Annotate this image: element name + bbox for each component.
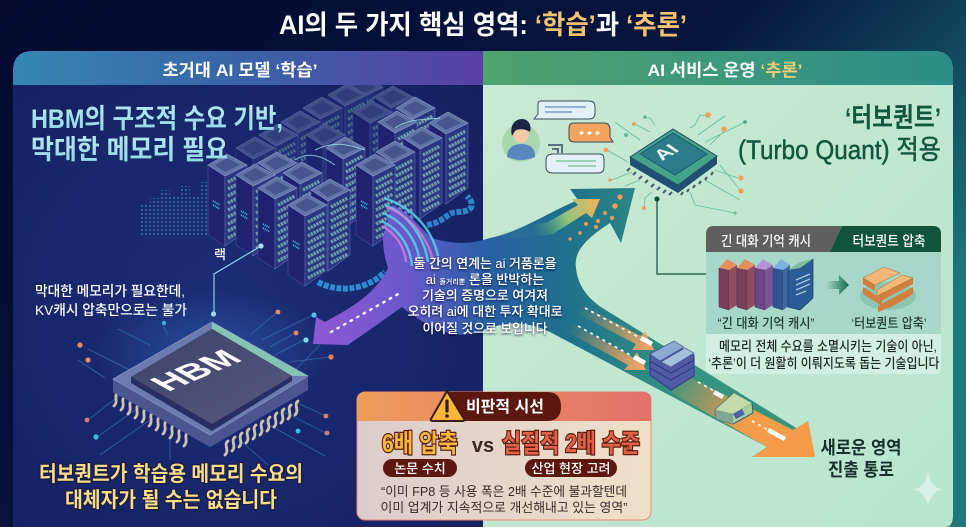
label: new market path xyxy=(820,438,902,480)
heading: HBM demand xyxy=(31,104,283,165)
arrow: compression xyxy=(826,275,849,295)
fiber strands xyxy=(381,198,438,266)
illustration: user and chat bubbles xyxy=(502,101,613,173)
central text: 기술의 증명으로 여겨져 xyxy=(422,288,548,303)
captions xyxy=(718,316,926,331)
captions: ‘터보퀀트 압축’ xyxy=(852,316,926,331)
pins xyxy=(627,168,713,195)
text: memory note xyxy=(35,283,187,318)
chip: AI: AI xyxy=(649,141,684,164)
white dashes xyxy=(578,308,772,432)
title: AI의 두 가지 핵심 영역: ‘학습’과 ‘추론’ xyxy=(279,10,687,40)
pill: paper figure: 논문 수치 xyxy=(394,461,446,476)
tab: long chat cache xyxy=(706,226,842,252)
stat: 6x compression: 6배 압축 xyxy=(382,430,458,458)
quote: 이미 업계가 지속적으로 개선해내고 있는 영역” xyxy=(380,500,628,515)
quote xyxy=(380,484,628,515)
pill: paper figure xyxy=(383,459,457,477)
central text: 오히려 ai에 대한 투자 확대로 xyxy=(408,304,563,319)
heading: turbo quant: ‘터보퀀트’ xyxy=(845,103,941,133)
data flow arrows xyxy=(313,188,815,457)
label: new market path: 새로운 영역 xyxy=(820,438,902,458)
label: rack callout: 랙 xyxy=(214,247,226,262)
purple arrow dots xyxy=(331,293,400,332)
text: memory note: KV캐시 압축만으로는 불가 xyxy=(35,302,187,318)
bubble: bottom xyxy=(546,154,604,173)
tab: turbo quant compression: 터보퀀트 압축 xyxy=(852,233,926,249)
bubble: top xyxy=(534,101,595,119)
orange dots on up arrow xyxy=(568,194,623,241)
conclusion: turbo quant cannot replace: 터보퀀트가 학습용 메모리 수요의 xyxy=(39,463,303,486)
heading: turbo quant: (Turbo Quant) 적용 xyxy=(738,135,941,165)
conclusion: turbo quant cannot replace xyxy=(39,463,303,512)
sparkle mark xyxy=(911,472,945,505)
circuit traces xyxy=(78,312,330,465)
panel: critical view xyxy=(357,391,651,520)
critical header xyxy=(357,392,651,421)
chip: HBM xyxy=(77,290,334,465)
heading: HBM demand: 막대한 메모리 필요 xyxy=(31,135,228,165)
central text: 둘 간의 연계는 ai 거품론을 xyxy=(414,256,557,271)
panel: cache compression xyxy=(706,226,941,374)
tab: long chat cache: 긴 대화 기억 캐시 xyxy=(721,233,811,249)
pins xyxy=(114,392,298,455)
chip body xyxy=(630,156,717,193)
inner light up arrow xyxy=(500,199,600,240)
server stack on arrow xyxy=(650,341,694,390)
left panel header: 초거대 AI 모델 ‘학습’ xyxy=(162,61,318,80)
circuit nodes xyxy=(77,310,334,440)
chip: AI xyxy=(604,112,747,215)
blue cable swirls under racks xyxy=(318,272,385,289)
label: new market path: 진출 통로 xyxy=(828,460,894,480)
description xyxy=(708,339,940,371)
small module on arrow xyxy=(715,393,753,424)
icon: compressed blocks xyxy=(860,267,916,312)
captions: “긴 대화 기억 캐시” xyxy=(718,316,814,331)
left panel header xyxy=(13,51,483,85)
circuit traces xyxy=(607,115,745,213)
vs: vs xyxy=(472,435,494,457)
central text: 이어질 것으로 보입니다 xyxy=(422,321,548,336)
panel: inference (right) xyxy=(483,51,953,527)
connector: AI chip to cache panel xyxy=(654,196,706,274)
central text xyxy=(408,256,563,336)
description: ‘추론’이 더 원활히 이뤄지도록 돕는 기술입니다 xyxy=(708,356,940,371)
pill: critical view: 비판적 시선 xyxy=(466,398,544,416)
panel: training (left) xyxy=(13,51,483,527)
text: memory note: 막대한 메모리가 필요한데, xyxy=(35,283,185,299)
tab: turbo quant compression xyxy=(830,226,941,252)
pill: critical view xyxy=(447,392,561,421)
circuit nodes xyxy=(604,112,747,215)
server racks xyxy=(208,76,468,286)
pill: industry: 산업 현장 고려 xyxy=(532,461,610,476)
equalizer dot graphic xyxy=(140,182,210,237)
conclusion: turbo quant cannot replace: 대체자가 될 수는 없습니다 xyxy=(65,489,277,512)
right panel header: AI 서비스 운영 ‘추론’ xyxy=(648,61,802,80)
icon: warning xyxy=(431,391,464,421)
quote: “이미 FP8 등 사용 폭은 2배 수준에 불과할텐데 xyxy=(381,484,627,499)
stat: real 2x: 실질적 2배 수준 xyxy=(502,430,640,458)
chip body xyxy=(113,376,308,447)
description: 메모리 전체 수요를 소멸시키는 기술이 아닌, xyxy=(719,339,937,354)
heading: turbo quant xyxy=(738,103,941,165)
icon: books xyxy=(719,259,813,310)
orange streams to server stack xyxy=(564,303,654,370)
bubble: orange xyxy=(569,123,613,142)
merged arrow shape: purple down-left, teal up-right and down-right xyxy=(313,188,815,457)
orange band after stack xyxy=(672,372,815,457)
chip: HBM: HBM xyxy=(142,345,251,396)
right panel header xyxy=(483,51,953,85)
heading: HBM demand: HBM의 구조적 수요 기반, xyxy=(31,104,283,134)
label: rack callout xyxy=(211,243,264,317)
central text: ai 돌거리뿐 론을 반박하는 xyxy=(426,272,544,287)
